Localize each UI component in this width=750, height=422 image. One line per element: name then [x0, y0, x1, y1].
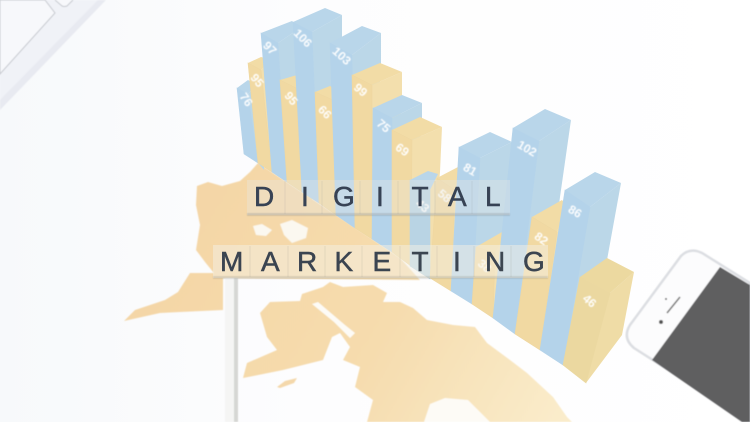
bar 13: [451, 132, 512, 320]
map: northern landmass: [196, 163, 420, 280]
bar value labels: 38: [475, 256, 494, 276]
map: white inlets: [253, 220, 308, 243]
bar value labels: 58: [435, 186, 454, 206]
bar value labels: 106: [291, 26, 315, 50]
bar 14: [472, 232, 505, 318]
bar 6: [315, 86, 345, 220]
bar value labels: 69: [393, 140, 412, 159]
bar value labels: 97: [260, 38, 280, 58]
bar 10: [392, 117, 442, 279]
map: lower white patches: [312, 302, 490, 422]
bar value labels: 95: [281, 89, 301, 108]
bar 2: [248, 57, 282, 178]
bar 4: [280, 75, 312, 200]
world map: [124, 163, 572, 422]
bar value labels: 46: [580, 291, 599, 311]
map: southern tip landmass: [124, 273, 223, 321]
bar 17: [540, 172, 621, 365]
bar value labels: 66: [315, 102, 335, 122]
letter tiles: marketing: [213, 245, 548, 279]
bar 12: [430, 167, 462, 291]
heading: marketing: MARKETING: [220, 246, 545, 277]
bar 15: [493, 109, 571, 350]
map: island: [277, 378, 297, 388]
icon: white stick: [225, 278, 238, 422]
bar value labels: [237, 26, 599, 311]
bar value labels: 75: [374, 116, 393, 136]
letter tiles: digital: [247, 180, 510, 216]
bar value labels: 76: [237, 90, 256, 109]
bar 7: [330, 26, 381, 239]
bar value labels: 95: [247, 71, 267, 90]
bar 9: [372, 95, 422, 266]
bar value labels: 99: [351, 80, 370, 100]
bar 1: [237, 80, 264, 170]
map: large continent: [243, 282, 572, 422]
bar 18: [563, 258, 634, 383]
bar value labels: 86: [566, 202, 585, 221]
bar value labels: 81: [461, 160, 480, 179]
bar 11: [410, 171, 438, 279]
icon: smartphone: [627, 251, 750, 422]
heading: digital: DIGITAL: [254, 181, 501, 212]
bar value labels: 82: [532, 229, 551, 248]
bar 5: [293, 8, 342, 215]
icon: keyboard corner: [0, 0, 106, 110]
bar value labels: 43: [413, 196, 432, 216]
bar value labels: 102: [515, 137, 539, 160]
bar chart: [237, 8, 634, 383]
bar 16: [515, 200, 566, 365]
bar value labels: 103: [330, 44, 354, 68]
bar 8: [352, 63, 402, 252]
bar 3: [261, 21, 302, 192]
